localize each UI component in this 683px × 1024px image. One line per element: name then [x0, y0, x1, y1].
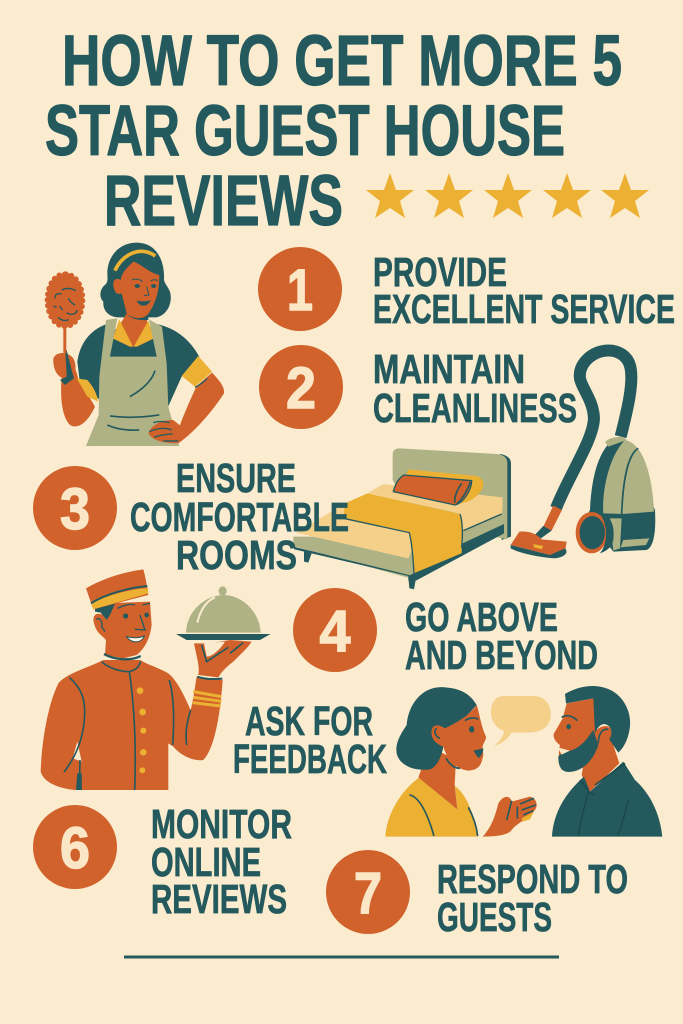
illustration: guest conversation [385, 686, 662, 837]
hose [556, 350, 631, 508]
illustration: housekeeper with feather duster [48, 243, 224, 446]
step 2 number badge [259, 345, 343, 429]
step 3 number badge [33, 466, 117, 550]
step 1 number badge [258, 247, 342, 331]
pillbox hat [86, 569, 148, 609]
step 4 label: AND BEYOND [405, 632, 598, 678]
illustration: bellhop with serving cloche [41, 569, 271, 790]
step 7 label: GUESTS [437, 894, 552, 940]
woman: hair [396, 687, 477, 770]
headboard [500, 454, 511, 540]
body [587, 437, 655, 552]
step 6 label: MONITOR [151, 801, 292, 847]
shoulders and sleeves [77, 324, 199, 410]
mattress [367, 484, 503, 531]
pillow [403, 469, 483, 503]
step 3 label: COMFORTABLE [130, 494, 349, 540]
step 6 label [151, 801, 292, 922]
step 1 label [373, 249, 675, 332]
man: hair and beard [565, 686, 630, 753]
speech bubble [491, 696, 551, 746]
step 2 label: MAINTAIN [373, 346, 525, 392]
illustration: vacuum cleaner [511, 350, 655, 558]
step 5 label: ASK FOR [245, 698, 373, 744]
man: face [554, 698, 612, 770]
step 2 number badge: 2 [286, 356, 316, 421]
step 3 label [130, 455, 349, 578]
bed frame [304, 551, 416, 589]
step 6 label: REVIEWS [151, 876, 287, 922]
woman: neck [418, 747, 457, 809]
step 7 label [437, 856, 628, 940]
step 6 number badge [33, 805, 117, 889]
man: shirt [552, 762, 662, 837]
man: neck [582, 740, 619, 792]
duster [63, 327, 66, 353]
step 4 label [405, 594, 598, 678]
step 3 number badge: 3 [60, 477, 90, 542]
woman: face [431, 705, 486, 771]
five gold stars rating [366, 173, 649, 218]
step 7 number badge: 7 [354, 861, 382, 926]
title: REVIEWS [104, 162, 343, 241]
step 4 number badge: 4 [320, 599, 350, 664]
step 4 number badge [293, 588, 377, 672]
woman: top [385, 777, 478, 837]
step 2 label [373, 346, 577, 431]
floor nozzle [511, 531, 567, 555]
uniform buttons [137, 687, 147, 773]
title [45, 22, 622, 241]
step 3 label: ROOMS [176, 532, 297, 578]
collar and seams [104, 654, 141, 659]
step 1 label: PROVIDE [373, 249, 507, 295]
step 1 number badge: 1 [287, 258, 313, 323]
cloche [186, 595, 261, 633]
step 7 number badge [326, 850, 410, 934]
step 2 label: CLEANLINESS [373, 385, 577, 431]
tray [176, 634, 271, 640]
step 6 label: ONLINE [151, 839, 261, 885]
step 5 label: FEEDBACK [233, 736, 387, 782]
face details [135, 284, 140, 288]
wheel [576, 512, 608, 553]
hand [194, 640, 252, 677]
step 3 label: ENSURE [176, 455, 296, 501]
step 4 label: GO ABOVE [405, 594, 558, 640]
step 5 label [233, 698, 387, 782]
arms and hands [55, 357, 95, 426]
neck and head [93, 602, 152, 658]
apron [86, 318, 179, 446]
body in uniform [41, 660, 223, 790]
sleeve stripes [193, 692, 221, 706]
woman: hand [483, 797, 537, 837]
hair [100, 243, 171, 317]
yellow blanket [343, 493, 462, 573]
step 6 number badge: 6 [60, 816, 90, 881]
illustration: bed [293, 448, 511, 589]
